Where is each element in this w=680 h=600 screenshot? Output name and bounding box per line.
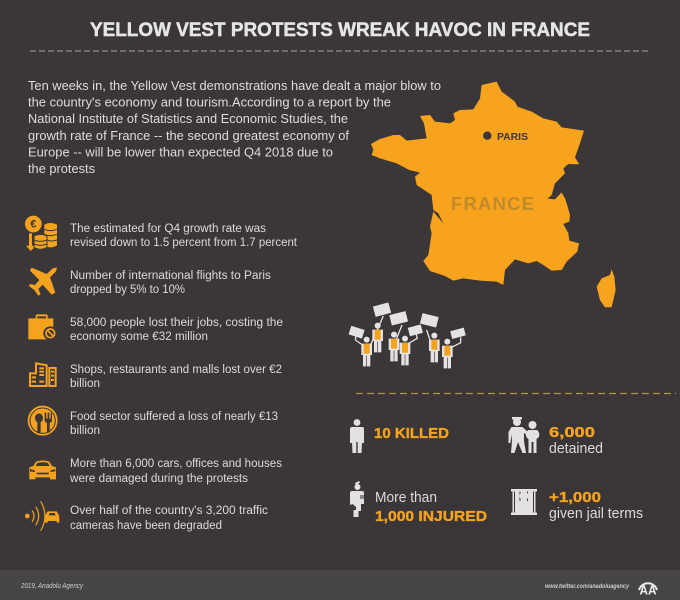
value: 1,000 INJURED (375, 508, 487, 525)
list: economic impacts: revised down to 1.5 percent from 1.7 percent (70, 237, 298, 249)
label: detained (549, 441, 603, 457)
label: More than (375, 490, 437, 506)
title: YELLOW VEST PROTESTS WREAK HAVOC IN FRANCE (90, 19, 590, 41)
map: Corsica (597, 269, 616, 307)
icon: prisoner behind bars (511, 489, 537, 515)
footer: credit: 2019, Anadolu Agency (20, 581, 84, 590)
icon: person (350, 419, 364, 453)
list: economic impacts: cameras have been degraded (70, 520, 222, 532)
stat: detained (508, 417, 603, 457)
list: economic impacts: dropped by 5% to 10% (70, 284, 185, 296)
intro text: Ten weeks in, the Yellow Vest demonstrations have dealt a major blow to (28, 79, 441, 93)
text: growth rate: The estimated for Q4 growth rate was (70, 223, 266, 235)
text: cars: More than 6,000 cars, offices and houses (70, 458, 282, 470)
text: shops: Shops, restaurants and malls lost over €2 (70, 364, 282, 376)
icon: plate and cutlery (28, 406, 58, 436)
icon: euro coins (25, 216, 57, 251)
France label: FRANCE (451, 193, 534, 214)
illustration: protesters (349, 302, 466, 368)
map: France (371, 82, 616, 307)
footer: url: www.twitter.com/anadoluagency (545, 583, 629, 590)
icon: traffic camera (25, 501, 59, 531)
icon: car (29, 460, 56, 479)
icon: briefcase (28, 314, 57, 340)
intro text: growth rate of France -- the second greatest economy of (28, 129, 350, 143)
label: given jail terms (549, 506, 643, 522)
value: 10 KILLED (374, 425, 449, 442)
intro text: the country's economy and tourism.According to a report by the (28, 96, 391, 110)
icon: plane (29, 267, 57, 296)
text: cameras: Over half of the country's 3,200 traffic (70, 505, 268, 517)
intro text: Europe -- will be lower than expected Q4 2018 due to (28, 146, 333, 160)
text: jobs: 58,000 people lost their jobs, costing the (70, 317, 283, 329)
intro text (28, 79, 441, 176)
list: economic impacts: were damaged during the protests (69, 473, 248, 485)
stat: jail terms (511, 489, 643, 522)
intro text: National Institute of Statistics and Economic Studies, the (28, 112, 348, 126)
text: flights: Number of international flights to Paris (70, 270, 271, 282)
stat: injured (350, 481, 487, 525)
value: +1,000 (549, 489, 601, 506)
icon: euro coins: € (30, 219, 36, 231)
icon: injured person (350, 481, 364, 517)
stat: killed (350, 419, 449, 453)
Paris marker (483, 132, 491, 140)
list: economic impacts: billion (70, 425, 100, 437)
text: food: Food sector suffered a loss of nearly €13 (70, 411, 278, 423)
value: 6,000 (549, 424, 595, 441)
list: economic impacts: billion (70, 378, 100, 390)
list: economic impacts (25, 216, 298, 532)
list: economic impacts: economy some €32 million (70, 331, 208, 343)
icon: police and detainee (508, 417, 539, 453)
intro text: the protests (28, 162, 95, 176)
icon: buildings (30, 363, 56, 386)
footer: AA logo: AA (640, 584, 656, 598)
Paris label: PARIS (497, 131, 528, 143)
